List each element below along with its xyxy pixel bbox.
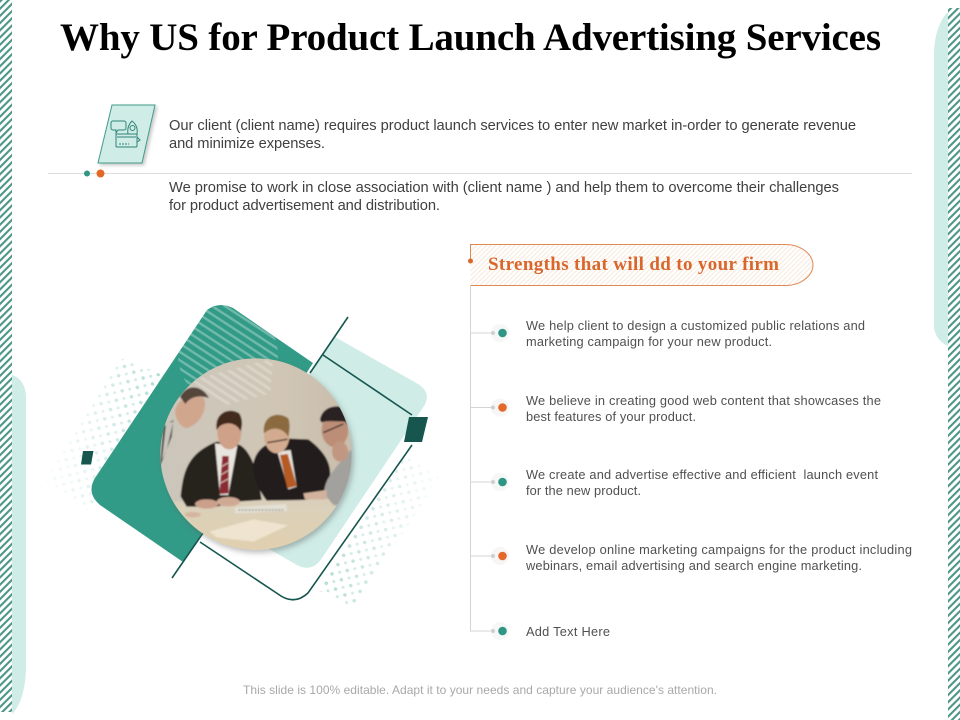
intro paragraph 2 bbox=[169, 180, 839, 214]
icon: product launch bbox=[98, 105, 155, 163]
intro paragraph 2: We promise to work in close association with (client name ) and help them to overcome their challenges bbox=[169, 180, 839, 196]
intro paragraph 1 bbox=[169, 118, 856, 152]
third man suit bbox=[253, 438, 330, 501]
strength item 1: We help client to design a customized public relations and bbox=[526, 318, 865, 333]
timeline spine bbox=[470, 285, 472, 631]
footer note: This slide is 100% editable. Adapt it to your needs and capture your audience's attention. bbox=[243, 683, 717, 697]
intro paragraph 1: Our client (client name) requires product launch services to enter new market in-order to generate revenue bbox=[169, 118, 856, 134]
dark outlines bbox=[172, 317, 412, 600]
halftone dots left bbox=[53, 358, 160, 510]
illustration: diamonds and photo bbox=[42, 305, 442, 608]
strength item 4: We develop online marketing campaigns for the product including bbox=[526, 542, 912, 557]
strengths heading banner bbox=[468, 244, 813, 286]
strength item 4 bbox=[470, 542, 912, 573]
intro paragraph 2: for product advertisement and distribution. bbox=[169, 198, 440, 214]
dark parallelogram large bbox=[404, 417, 428, 442]
dark parallelogram small bbox=[81, 451, 94, 464]
strength item 2 bbox=[470, 393, 881, 424]
strengths heading banner: Strengths that will dd to your firm bbox=[488, 254, 779, 275]
teal diamond bbox=[91, 305, 313, 562]
left side band bbox=[0, 0, 26, 714]
strength item 1 bbox=[470, 318, 865, 349]
leaning man bbox=[160, 420, 173, 467]
strength item 3: for the new product. bbox=[526, 483, 641, 498]
halftone dots right bbox=[320, 458, 432, 604]
strength item 2: We believe in creating good web content that showcases the bbox=[526, 393, 881, 408]
title: Why US for Product Launch Advertising Services bbox=[60, 16, 881, 59]
photo: meeting bbox=[153, 353, 360, 557]
fourth man bbox=[324, 450, 355, 507]
striped circle bbox=[178, 305, 278, 385]
second man suit bbox=[181, 442, 262, 507]
strength item 3 bbox=[470, 467, 878, 498]
papers on table bbox=[235, 504, 287, 513]
intro paragraph 1: and minimize expenses. bbox=[169, 136, 325, 152]
hands and shirt cuffs bbox=[195, 499, 218, 509]
strength item 1: marketing campaign for your new product. bbox=[526, 334, 772, 349]
strength item 5: Add Text Here bbox=[526, 624, 610, 639]
strength item 4: webinars, email advertising and search engine marketing. bbox=[525, 558, 862, 573]
divider with dots bbox=[48, 170, 912, 178]
right side band bbox=[934, 8, 960, 720]
strength item 2: best features of your product. bbox=[526, 409, 696, 424]
strength item 5 bbox=[470, 622, 610, 640]
strength item 3: We create and advertise effective and efficient launch event bbox=[526, 467, 878, 482]
light diamond bbox=[262, 337, 427, 568]
